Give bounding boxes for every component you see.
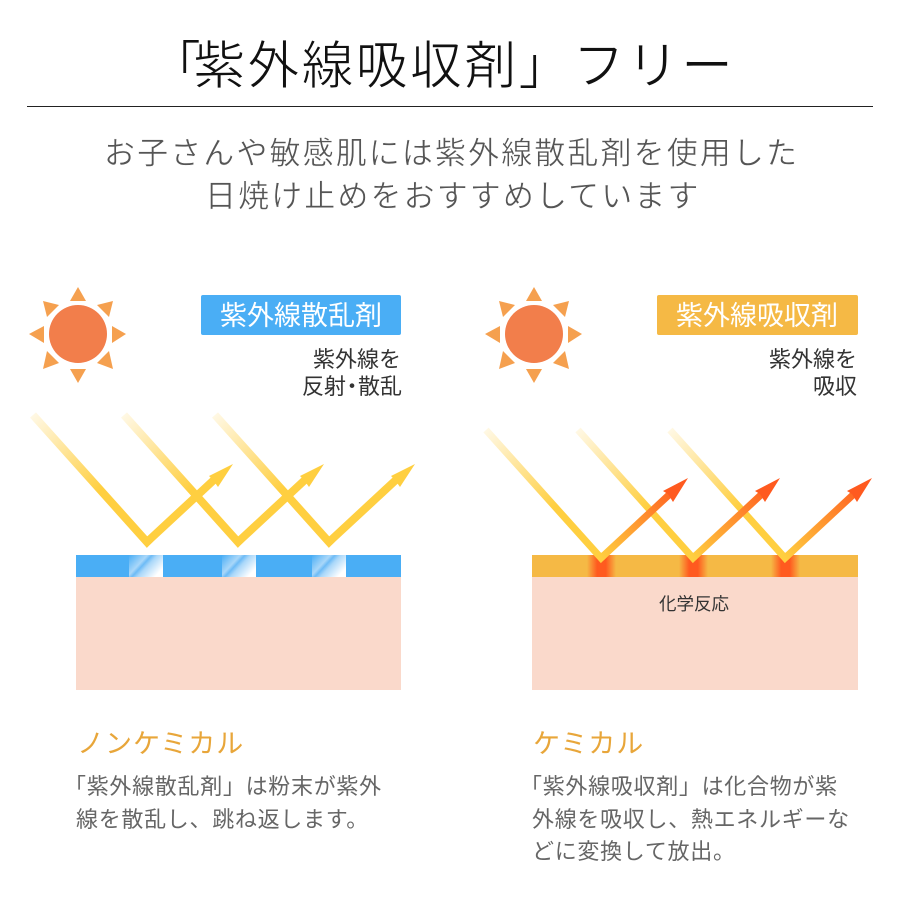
description: chemical — [520, 774, 850, 864]
description: chemical: 「紫外線吸収剤」は化合物が紫 — [520, 774, 838, 799]
caption: absorbs: 紫外線を — [769, 347, 857, 372]
panel: chemical absorbing agent — [485, 287, 872, 864]
label: absorbing agent: 紫外線吸収剤 — [676, 301, 838, 331]
label: scattering agent — [201, 295, 401, 335]
label: absorbing agent — [657, 295, 858, 335]
panel: non-chemical scattering agent — [29, 287, 415, 832]
label: scattering agent: 紫外線散乱剤 — [220, 301, 382, 331]
heading: chemical: ケミカル — [533, 729, 644, 759]
intro text: 日焼け止めをおすすめしています — [205, 179, 701, 214]
caption: reflects and scatters — [302, 347, 402, 399]
caption: absorbs — [769, 347, 857, 399]
description: non-chemical — [64, 774, 382, 832]
orange absorbing layer — [532, 555, 858, 577]
icon: sun left — [29, 287, 126, 383]
caption: reflects and scatters: 紫外線を — [313, 347, 401, 372]
skin layer — [76, 577, 401, 690]
label: chemical reaction: 化学反応 — [659, 594, 729, 614]
caption: absorbs: 吸収 — [813, 374, 857, 399]
caption: reflects and scatters: 反射・散乱 — [302, 374, 402, 399]
description: non-chemical: 「紫外線散乱剤」は粉末が紫外 — [64, 774, 382, 799]
title underline — [27, 106, 873, 107]
icon: sun right — [485, 287, 582, 383]
arrows: absorbed rays — [486, 430, 872, 558]
blue scattering layer — [76, 555, 401, 577]
title: 「紫外線吸収剤」フリー — [149, 38, 735, 96]
description: chemical: 外線を吸収し、熱エネルギーな — [532, 807, 850, 832]
heading: non-chemical: ノンケミカル — [77, 729, 244, 759]
description: non-chemical: 線を散乱し、跳ね返します。 — [76, 807, 369, 832]
arrows: reflected rays — [33, 415, 415, 542]
skin layer — [532, 577, 858, 690]
description: chemical: どに変換して放出。 — [532, 839, 736, 864]
intro text — [104, 136, 799, 214]
intro text: お子さんや敏感肌には紫外線散乱剤を使用した — [104, 136, 799, 171]
